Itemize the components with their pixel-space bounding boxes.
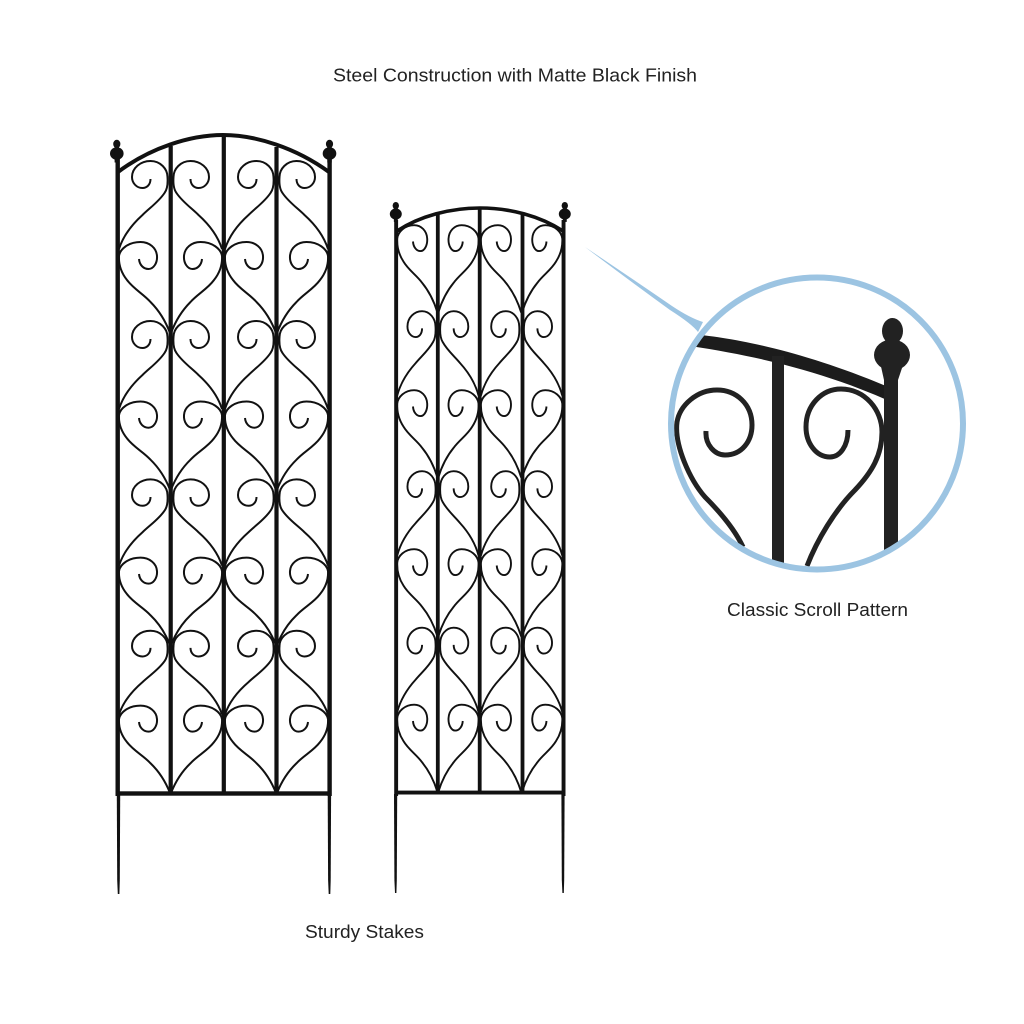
callout: magnified scroll detail bbox=[671, 278, 963, 570]
callout pointer bbox=[585, 247, 703, 332]
large trellis finials bbox=[110, 140, 336, 162]
small trellis arched top rail bbox=[397, 208, 563, 231]
magnified post bbox=[884, 380, 898, 550]
large trellis posts and bars bbox=[116, 135, 332, 796]
caption: sturdy stakes: Sturdy Stakes bbox=[305, 922, 424, 942]
small trellis bbox=[390, 202, 571, 893]
magnified left scroll bbox=[677, 390, 752, 547]
magnified finial bbox=[874, 318, 910, 380]
magnified arch rail bbox=[690, 334, 887, 400]
small trellis stakes bbox=[394, 794, 565, 893]
magnified ironwork bbox=[677, 318, 910, 568]
large trellis arched top rail bbox=[118, 135, 329, 172]
large trellis stakes bbox=[117, 795, 331, 894]
large trellis scrollwork bbox=[119, 161, 328, 793]
small trellis scrollwork bbox=[397, 225, 562, 792]
large trellis bbox=[110, 135, 336, 894]
small trellis finials bbox=[390, 202, 571, 222]
small trellis posts and bars bbox=[394, 208, 566, 796]
lens ring bbox=[671, 278, 963, 570]
title: steel construction: Steel Construction with Matte Black Finish bbox=[333, 66, 697, 86]
magnified vertical bar bbox=[772, 356, 784, 568]
magnified right scroll bbox=[806, 389, 882, 566]
caption: classic scroll pattern: Classic Scroll Pattern bbox=[727, 600, 908, 620]
